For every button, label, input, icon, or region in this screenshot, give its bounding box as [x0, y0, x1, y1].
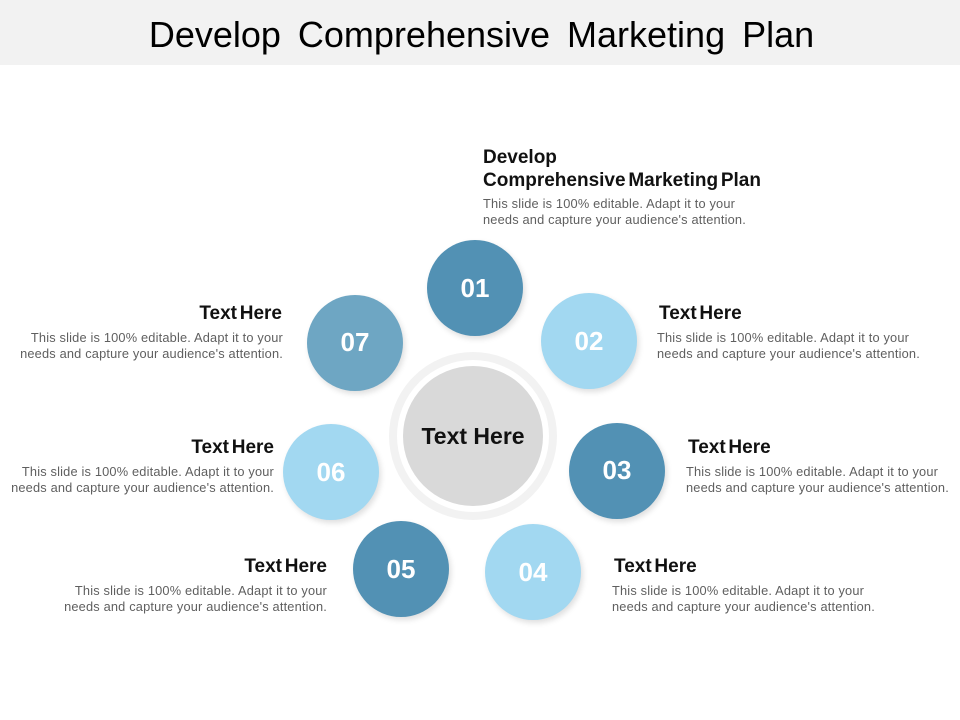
- center ring: [389, 352, 557, 520]
- circle 07: 07: [341, 327, 369, 357]
- text block 07: Text Here: [199, 303, 282, 324]
- text block 04: needs and capture your audience's attention.: [612, 599, 875, 614]
- text block 04: This slide is 100% editable. Adapt it to your: [612, 583, 864, 598]
- circle 05: [353, 521, 449, 617]
- circle 01: 01: [461, 273, 489, 303]
- text block 01: needs and capture your audience's attention.: [483, 212, 746, 227]
- circle 07: [307, 295, 403, 391]
- text block 05: This slide is 100% editable. Adapt it to your: [75, 583, 327, 598]
- circle 03: 03: [603, 455, 631, 485]
- text block 01: This slide is 100% editable. Adapt it to your: [483, 196, 735, 211]
- text block 03: This slide is 100% editable. Adapt it to your: [686, 464, 938, 479]
- circle 05: 05: [387, 554, 415, 584]
- text block 01: [483, 147, 761, 227]
- text block 06: This slide is 100% editable. Adapt it to your: [22, 464, 274, 479]
- text block 07: needs and capture your audience's attention.: [20, 346, 283, 361]
- text block 05: Text Here: [244, 556, 327, 577]
- center circle: [403, 366, 543, 506]
- text block 05: needs and capture your audience's attention.: [64, 599, 327, 614]
- title: Develop Comprehensive Marketing Plan: [149, 14, 814, 55]
- circle 03: [569, 423, 665, 519]
- text block 06: [11, 437, 274, 495]
- text block 02: needs and capture your audience's attention.: [657, 346, 920, 361]
- circle 06: [283, 424, 379, 520]
- text block 03: Text Here: [688, 437, 771, 458]
- text block 02: [657, 303, 920, 361]
- text block 02: This slide is 100% editable. Adapt it to your: [657, 330, 909, 345]
- text block 06: Text Here: [191, 437, 274, 458]
- text block 02: Text Here: [659, 303, 742, 324]
- circle 04: [485, 524, 581, 620]
- text block 04: [612, 556, 875, 614]
- text block 04: Text Here: [614, 556, 697, 577]
- text block 05: [64, 556, 327, 614]
- text block 07: This slide is 100% editable. Adapt it to your: [31, 330, 283, 345]
- text block 07: [20, 303, 283, 361]
- text block 03: needs and capture your audience's attention.: [686, 480, 949, 495]
- text block 01: Comprehensive Marketing Plan: [483, 170, 761, 191]
- text block 01: Develop: [483, 147, 557, 168]
- text block 06: needs and capture your audience's attention.: [11, 480, 274, 495]
- circle 02: 02: [575, 326, 603, 356]
- circle 01: [427, 240, 523, 336]
- title band: [0, 0, 960, 65]
- center circle: Text Here: [421, 423, 525, 449]
- circle 02: [541, 293, 637, 389]
- circle 04: 04: [519, 557, 547, 587]
- text block 03: [686, 437, 949, 495]
- circle 06: 06: [317, 457, 345, 487]
